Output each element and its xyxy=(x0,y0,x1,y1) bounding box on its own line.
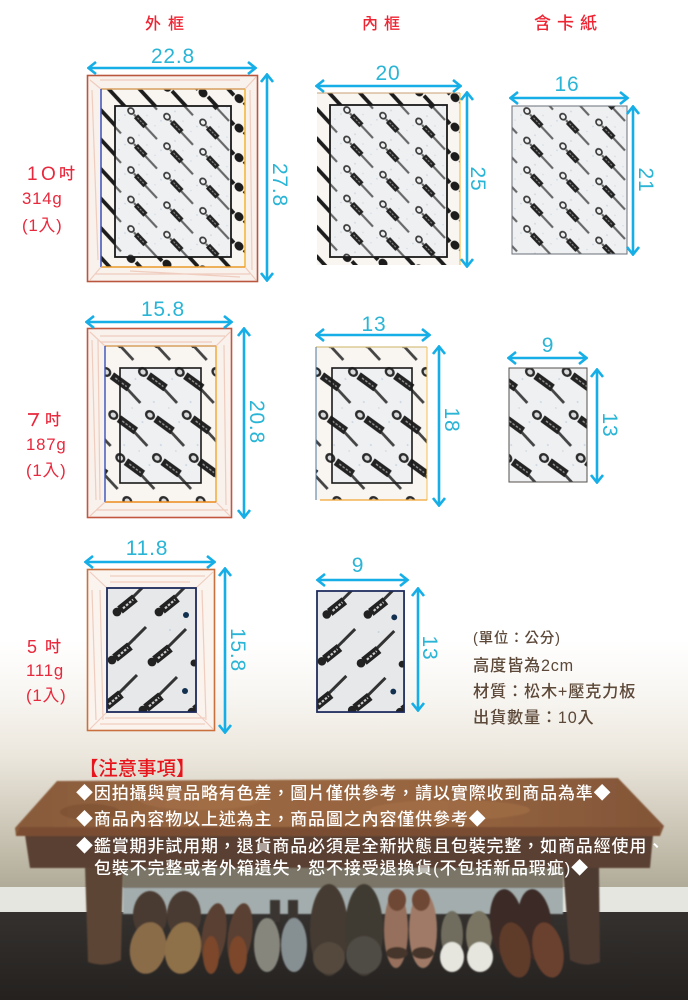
width arrow 11.8 xyxy=(86,537,214,562)
row label: 7 inch: 吋 xyxy=(45,406,61,430)
shoes under the bench xyxy=(126,884,568,981)
width arrow 9 xyxy=(509,334,586,358)
notes text block: 包裝不完整或者外箱遺失，恕不接受退換貨(不包括新品瑕疵)◆ xyxy=(94,858,589,878)
row label: 7 inch xyxy=(26,406,67,480)
width arrow 13 xyxy=(317,313,429,336)
row label: 10 inch: 吋 xyxy=(59,160,75,184)
bench illustration xyxy=(15,778,664,965)
heading: with card paper: 含卡紙 xyxy=(534,9,603,34)
row label: 5 inch: 5 xyxy=(27,637,37,657)
height arrow 18: 18 xyxy=(440,408,463,432)
notes text block: ◆鑑賞期非試用期，退貨商品必須是全新狀態且包裝完整，如商品經使用、 xyxy=(76,836,665,856)
height arrow 15.8: 15.8 xyxy=(226,628,249,672)
spec text block xyxy=(473,629,636,727)
row label: 10 inch: O xyxy=(41,164,56,185)
panel: 5 inch inner frame xyxy=(309,582,433,716)
frame: 5 inch outer xyxy=(88,570,226,730)
width arrow 11.8: 11.8 xyxy=(126,537,168,560)
panel: 10 inch inner frame xyxy=(317,93,460,265)
height arrow 13 xyxy=(418,589,441,710)
width arrow 22.8: 22.8 xyxy=(151,45,195,68)
height arrow 13: 13 xyxy=(418,636,441,660)
width arrow 9 xyxy=(318,554,407,580)
row label: 7 inch: (1入) xyxy=(26,461,66,480)
spec text block: 材質：松木+壓克力板 xyxy=(473,683,636,701)
row label: 10 inch: 1 xyxy=(27,164,38,185)
panel: 10 inch card paper xyxy=(512,106,627,254)
height arrow 25: 25 xyxy=(466,167,489,191)
width arrow 9: 9 xyxy=(542,334,554,357)
width arrow 15.8: 15.8 xyxy=(141,298,185,321)
spec text block: (單位：公分) xyxy=(473,629,561,647)
notes heading: 【注意事項】 xyxy=(79,752,195,781)
notes text block: ◆商品內容物以上述為主，商品圖之內容僅供參考◆ xyxy=(76,809,487,829)
frame: 7 inch outer xyxy=(88,328,232,518)
height arrow 20.8: 20.8 xyxy=(245,400,268,444)
floor xyxy=(0,912,688,1000)
row label: 10 inch xyxy=(22,160,75,235)
background wall xyxy=(0,640,688,915)
heading: outer frame: 外框 xyxy=(145,10,191,34)
row label: 7 inch: 187g xyxy=(26,435,67,454)
frame: 10 inch outer xyxy=(88,76,258,282)
width arrow 9: 9 xyxy=(352,554,364,577)
notes text block xyxy=(76,783,665,878)
height arrow 13: 13 xyxy=(598,413,621,437)
notes text block: ◆因拍攝與實品略有色差，圖片僅供參考，請以實際收到商品為準◆ xyxy=(76,783,612,803)
spec text block: 高度皆為2cm xyxy=(473,656,574,675)
row label: 5 inch: 吋 xyxy=(45,633,61,657)
panel: 7 inch card paper xyxy=(509,368,587,482)
panel: 7 inch inner frame xyxy=(316,347,427,500)
spec text block: 出貨數量：10入 xyxy=(473,709,595,727)
heading: inner frame: 內框 xyxy=(362,10,406,34)
height arrow 13 xyxy=(597,370,621,482)
width arrow 16 xyxy=(511,73,627,98)
width arrow 16: 16 xyxy=(555,73,579,96)
height arrow 21: 21 xyxy=(634,168,657,192)
row label: 5 inch: (1入) xyxy=(26,686,66,705)
row label: 5 inch xyxy=(26,633,66,705)
row label: 10 inch: (1入) xyxy=(22,216,62,235)
row label: 5 inch: 111g xyxy=(26,661,64,680)
row label: 10 inch: 314g xyxy=(22,189,63,208)
width arrow 13: 13 xyxy=(362,313,386,336)
height arrow 27.8: 27.8 xyxy=(268,163,291,207)
width arrow 20: 20 xyxy=(376,62,400,85)
baseboard xyxy=(0,887,688,912)
